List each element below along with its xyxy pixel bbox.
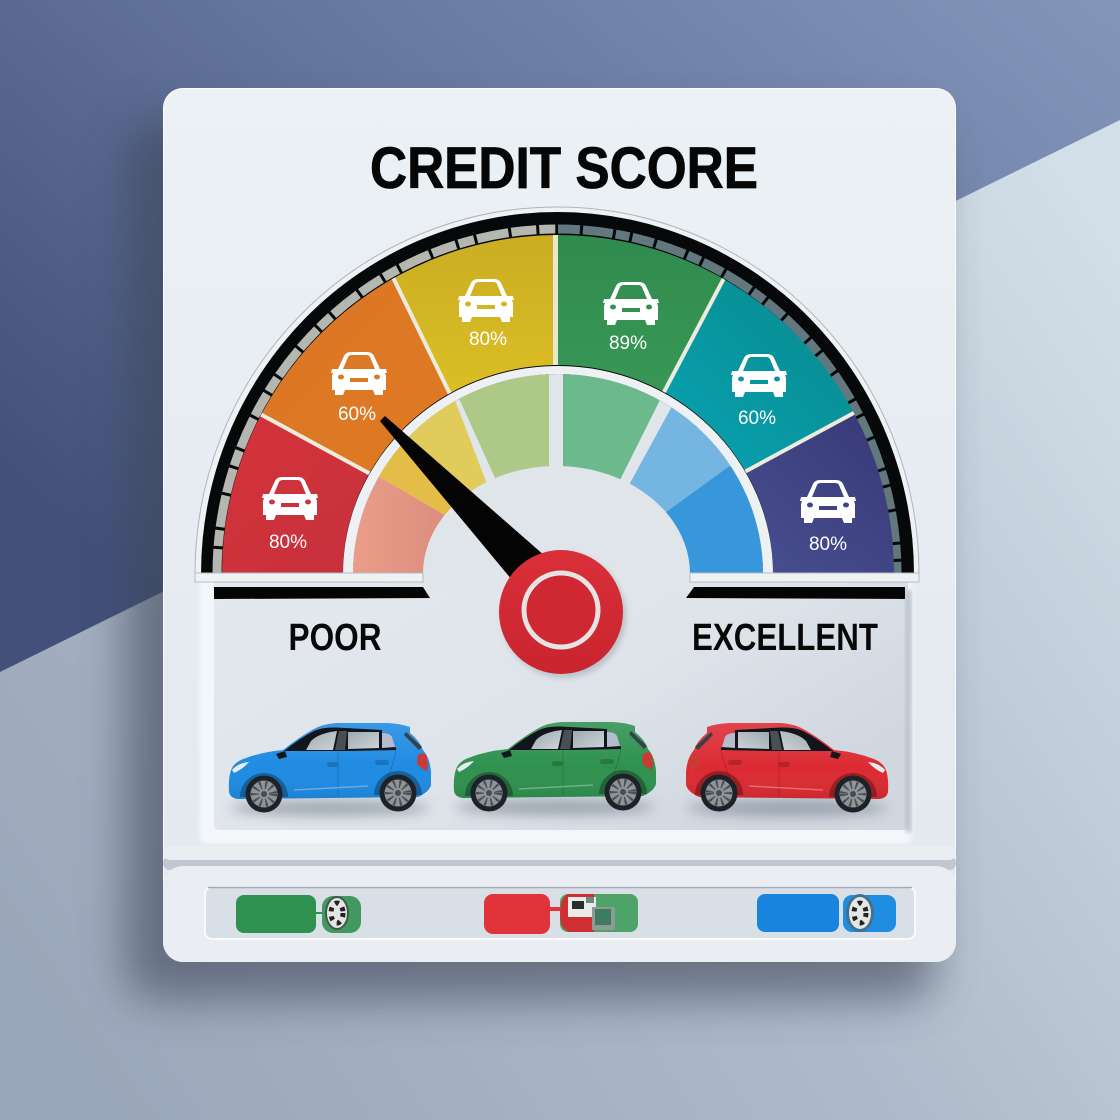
- legend: green key: [236, 895, 361, 933]
- gauge baseline plate right: [690, 573, 919, 582]
- segment: green: [558, 235, 724, 392]
- left black bar: [214, 587, 430, 599]
- needle: [380, 416, 545, 580]
- gauge baseline plate left: [195, 573, 423, 582]
- label: teal percent: 60%: [738, 408, 776, 429]
- gauge black track: [201, 212, 914, 574]
- pale segment: green: [563, 374, 660, 480]
- icon: car teal segment: [731, 354, 787, 397]
- segment divider: [553, 235, 558, 365]
- pale segments: [353, 374, 763, 572]
- icon: car green segment: [603, 282, 659, 325]
- inner disc: [353, 374, 763, 574]
- gauge: [195, 207, 919, 599]
- icon: car purple segment: [800, 480, 856, 523]
- segment: yellow: [394, 235, 553, 394]
- label: green percent: 89%: [609, 333, 647, 354]
- gauge rim: [195, 207, 919, 574]
- colored segments: [222, 235, 894, 572]
- label: purple percent: 80%: [809, 534, 847, 555]
- icon: car orange segment: [331, 352, 387, 395]
- label: poor: POOR: [288, 617, 382, 659]
- card shadow: [125, 120, 935, 1000]
- disc to tray join: [423, 572, 690, 592]
- pale segment: light green: [459, 374, 549, 478]
- title: CREDIT SCORE: [370, 136, 758, 201]
- gauge tick marks left: [217, 229, 558, 574]
- panel: lower recessed tray: [200, 578, 912, 844]
- legend: blue key: [757, 894, 896, 932]
- inner ring: [343, 366, 773, 574]
- gauge tick marks right: [558, 229, 897, 574]
- icon: car red segment: [262, 477, 318, 520]
- icon: car yellow segment: [458, 279, 514, 322]
- label: excellent: EXCELLENT: [692, 617, 878, 659]
- gauge hub: [499, 550, 626, 678]
- car: green: [454, 722, 656, 815]
- label: orange percent: 60%: [338, 404, 376, 425]
- segment: teal: [664, 279, 854, 472]
- panel: legend tray: [163, 846, 956, 962]
- pale segment: pink: [353, 476, 445, 572]
- pale segment: light yellow: [380, 401, 486, 515]
- pale segment: light blue: [630, 408, 730, 512]
- panel: credit score card: [163, 88, 956, 962]
- car: red: [686, 723, 888, 816]
- pale segment: gold: [379, 446, 452, 515]
- pale segment: blue: [666, 466, 763, 572]
- car: blue: [229, 723, 431, 816]
- segment: orange: [261, 278, 450, 474]
- segment: red: [222, 414, 370, 572]
- right black bar: [686, 587, 905, 599]
- legend: red key: [484, 894, 638, 934]
- label: yellow percent: 80%: [469, 329, 507, 350]
- segment: purple: [746, 413, 894, 572]
- label: red percent: 80%: [269, 532, 307, 553]
